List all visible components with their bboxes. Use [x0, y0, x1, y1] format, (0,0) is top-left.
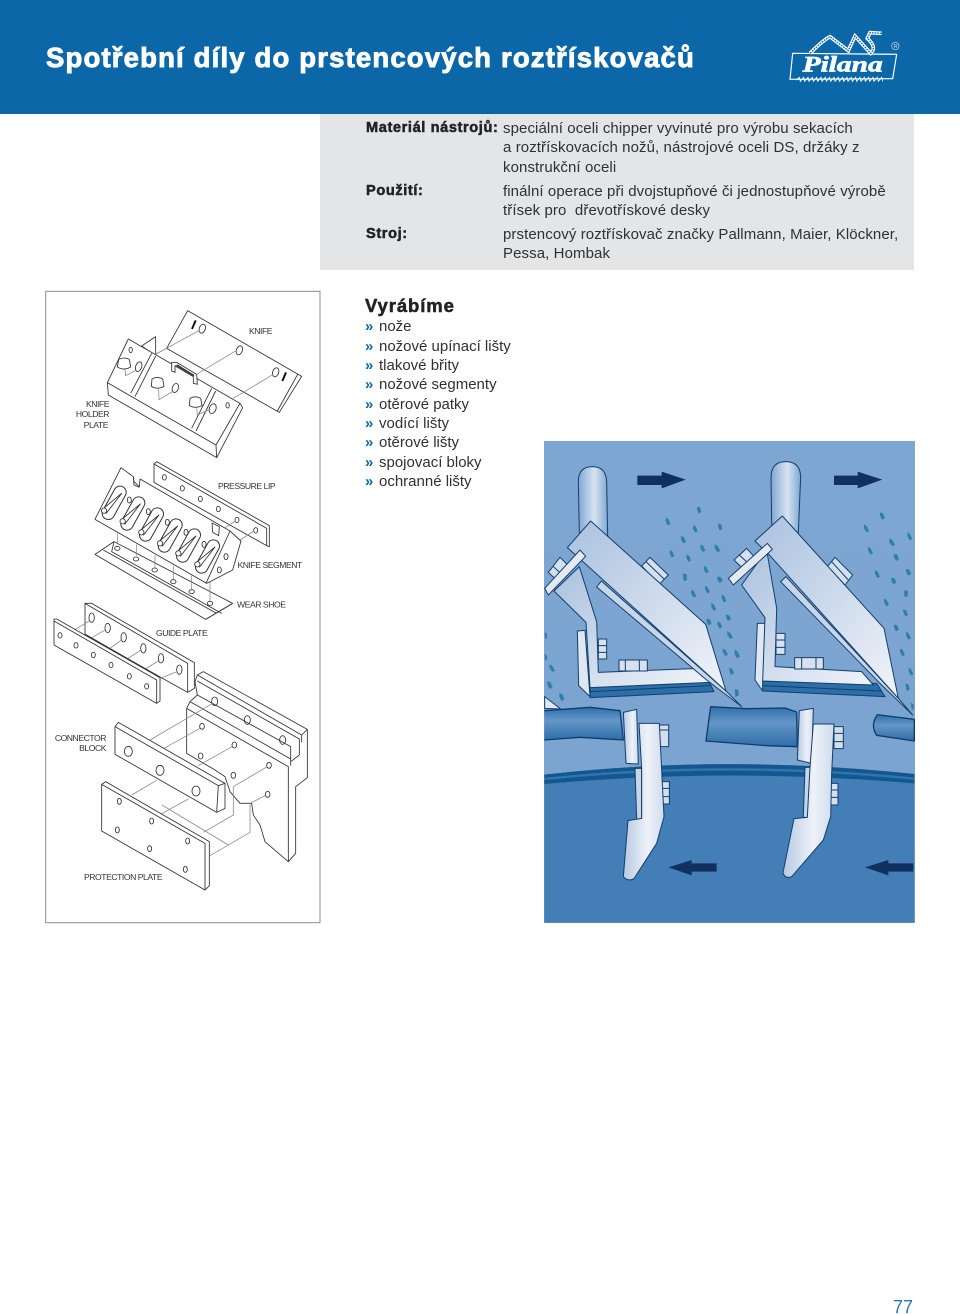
product list: otěrové lišty [379, 434, 459, 451]
label: material: Materiál nástrojů: [366, 120, 498, 136]
part labels: GUIDE PLATE [156, 628, 208, 638]
text: machine: Pessa, Hombak [503, 245, 610, 262]
product list: » [365, 357, 373, 374]
text: machine [503, 226, 898, 262]
header band [0, 0, 960, 114]
product list: otěrové patky [379, 396, 469, 412]
product list: » [365, 318, 373, 335]
product list: nožové upínací lišty [379, 338, 511, 354]
text: machine: prstencový roztřískovač značky Pallmann, Maier, Klöckner, [503, 226, 898, 243]
title: Spotřební díly do prstencových roztřískovačů [46, 42, 695, 73]
part labels: KNIFE [249, 326, 273, 336]
label: use: Použití: [366, 183, 424, 199]
part labels [55, 326, 303, 882]
part: main plate [150, 672, 307, 862]
text: material: konstrukční oceli [503, 159, 616, 176]
product list: vodící lišty [379, 415, 449, 432]
part: wear shoe [95, 542, 233, 619]
flow arrows bottom [668, 860, 913, 875]
product list: » [365, 396, 373, 412]
product list: spojovací bloky [379, 454, 482, 470]
part: guide plate front [54, 619, 160, 703]
part: guide plate back [75, 603, 194, 692]
product list: » [365, 376, 373, 393]
part labels: PRESSURE LIP [218, 481, 276, 491]
product list: nožové segmenty [379, 376, 497, 393]
wood chips [545, 507, 914, 710]
logo: Pilana: Pilana [801, 52, 883, 77]
product list [365, 318, 511, 490]
panel: material info [320, 114, 914, 270]
part labels: HOLDER [76, 409, 109, 419]
product list: » [365, 415, 373, 432]
part labels: WEAR SHOE [237, 600, 286, 610]
part labels: KNIFE [86, 399, 110, 409]
knife assembly 2 [728, 462, 913, 715]
product list: » [365, 454, 373, 470]
label: machine: Stroj: [366, 226, 408, 242]
product list: nože [379, 318, 412, 335]
logo: Pilana: R [894, 44, 898, 50]
product list: tlakové břity [379, 357, 459, 374]
part: knife holder plate [107, 330, 273, 458]
text: use: třísek pro dřevotřískové desky [503, 202, 710, 219]
knife tip at left edge [545, 697, 561, 709]
product list: » [365, 473, 373, 490]
heading: we produce: Vyrábíme [365, 295, 455, 316]
product list: ochranné lišty [379, 473, 472, 490]
part: knife [167, 311, 302, 412]
rollers [544, 707, 914, 747]
part: knife segment [95, 468, 254, 601]
exploded parts diagram [45, 290, 320, 924]
part labels: PLATE [84, 420, 109, 430]
part: connector block [115, 722, 225, 814]
product list: » [365, 338, 373, 354]
text: material: speciální oceli chipper vyvinuté pro výrobu sekacích [503, 120, 853, 137]
text: material [503, 120, 860, 176]
part: pressure lip [154, 462, 269, 547]
part labels: PROTECTION PLATE [84, 872, 163, 882]
part: protection plate [102, 782, 209, 890]
text: use [503, 183, 886, 219]
knife assembly 1 [545, 467, 742, 707]
flow arrows top [637, 472, 882, 488]
product list: » [365, 434, 373, 451]
part labels: KNIFE SEGMENT [238, 560, 303, 570]
drum [544, 764, 914, 923]
part labels: CONNECTOR [55, 733, 106, 743]
part labels: BLOCK [79, 743, 107, 753]
illustration: chipper knives [544, 441, 915, 923]
text: material: a roztřískovacích nožů, nástrojové oceli DS, držáky z [503, 139, 860, 156]
text: use: finální operace při dvojstupňové či jednostupňové výrobě [503, 183, 886, 200]
counter knives [623, 708, 843, 880]
logo: Pilana [789, 30, 900, 82]
